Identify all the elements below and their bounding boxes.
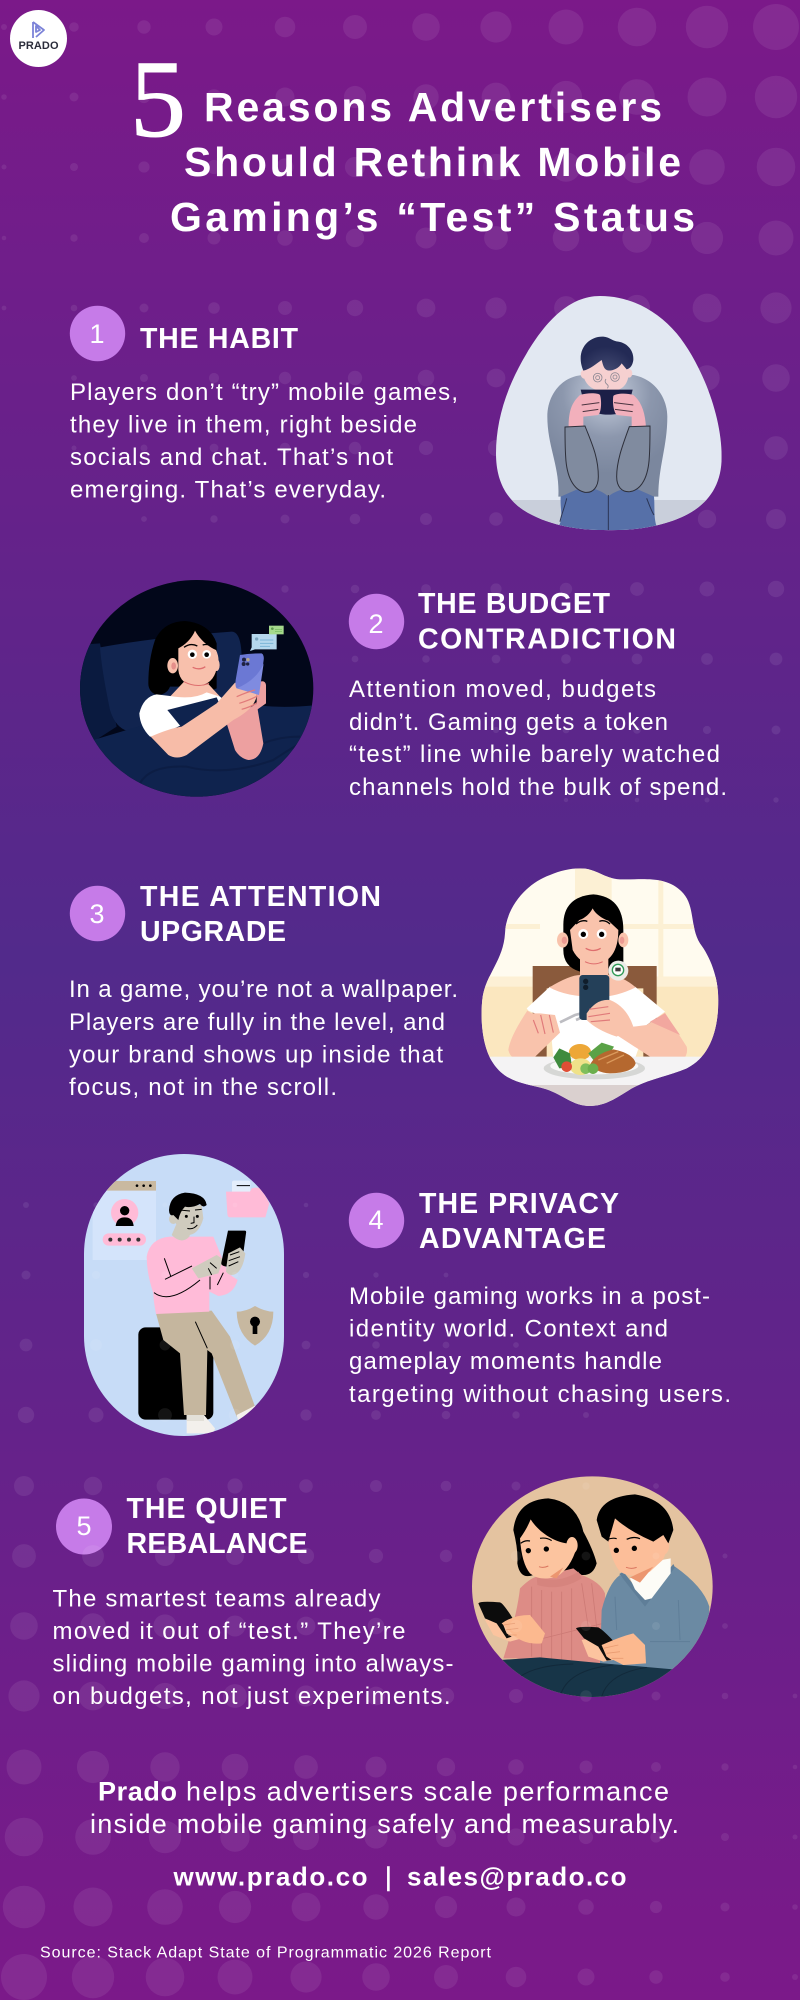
- number badge 5: 5: [76, 1511, 92, 1541]
- heading: the quiet rebalance: REBALANCE: [126, 1528, 308, 1560]
- body text 5: moved it out of “test.” They’re: [52, 1618, 406, 1645]
- heading: the quiet rebalance: [126, 1493, 308, 1560]
- logo: Prado: PRADO: [18, 40, 59, 52]
- body text 1: [70, 379, 458, 504]
- illustration: man absorbed in phone: [496, 296, 722, 530]
- body text 5: sliding mobile gaming into always-: [52, 1650, 454, 1678]
- panel: reason 1 the habit: [70, 296, 722, 530]
- body text 3: Players are fully in the level, and: [69, 1009, 445, 1036]
- body text 4: Mobile gaming works in a post-: [349, 1283, 710, 1310]
- panel: reason 5 the quiet rebalance: [52, 1470, 720, 1710]
- closing statement: helps advertisers scale performance: [186, 1776, 669, 1806]
- body text 4: targeting without chasing users.: [349, 1381, 731, 1408]
- number badge 2: 2: [368, 609, 384, 639]
- body text 3: [69, 976, 458, 1101]
- heading: the habit: THE HABIT: [140, 323, 299, 355]
- number badge 2: [349, 594, 404, 649]
- body text 5: on budgets, not just experiments.: [52, 1683, 450, 1710]
- body text 1: socials and chat. That’s not: [70, 444, 393, 471]
- heading: the budget contradiction: THE BUDGET: [418, 588, 611, 620]
- body text 2: Attention moved, budgets: [349, 676, 656, 703]
- heading: the attention upgrade: THE ATTENTION: [140, 881, 381, 913]
- illustration: man with phone and privacy icons: [80, 1150, 290, 1440]
- body text 2: channels hold the bulk of spend.: [349, 774, 727, 801]
- contact links: www.prado.co: [172, 1862, 368, 1892]
- title: [130, 38, 695, 240]
- body text 1: emerging. That’s everyday.: [70, 476, 386, 504]
- body text 5: The smartest teams already: [52, 1586, 380, 1612]
- body text 1: Players don’t “try” mobile games,: [70, 379, 458, 406]
- heading: the privacy advantage: THE PRIVACY: [419, 1188, 619, 1220]
- number badge 3: [70, 886, 125, 941]
- closing statement: [90, 1776, 679, 1839]
- number badge 1: 1: [89, 319, 105, 349]
- body text 3: focus, not in the scroll.: [69, 1074, 337, 1101]
- body text 2: didn’t. Gaming gets a token: [349, 709, 668, 736]
- contact links: sales@prado.co: [407, 1862, 626, 1892]
- heading: the quiet rebalance: THE QUIET: [126, 1493, 287, 1525]
- body text 4: [349, 1283, 731, 1408]
- title: Gaming’s “Test” Status: [170, 194, 695, 240]
- body text 4: gameplay moments handle: [349, 1348, 662, 1375]
- number badge 4: 4: [368, 1205, 384, 1235]
- heading: the attention upgrade: UPGRADE: [140, 916, 286, 948]
- number badge 5: [56, 1498, 112, 1554]
- body text 3: In a game, you’re not a wallpaper.: [69, 976, 458, 1003]
- title: 5: [130, 38, 186, 160]
- title: Reasons Advertisers: [204, 84, 662, 130]
- number badge 4: [349, 1193, 404, 1248]
- body text 2: [349, 676, 727, 801]
- panel: reason 2 the budget contradiction: [73, 573, 727, 807]
- heading: the privacy advantage: [419, 1188, 619, 1255]
- heading: the attention upgrade: [140, 881, 381, 948]
- contact links: |: [385, 1862, 392, 1892]
- illustration: couple on phones: [467, 1470, 720, 1703]
- panel: reason 3 the attention upgrade: [69, 863, 723, 1110]
- closing statement: Prado: [98, 1776, 177, 1806]
- heading: the privacy advantage: ADVANTAGE: [419, 1223, 606, 1255]
- heading: the budget contradiction: CONTRADICTION: [418, 624, 676, 656]
- number badge 3: 3: [89, 899, 105, 929]
- source note: Source: Stack Adapt State of Programmatic 2026 Report: [40, 1944, 492, 1962]
- body text 1: they live in them, right beside: [70, 412, 417, 438]
- illustration: woman in bed with phone: [80, 580, 314, 797]
- number badge 1: [70, 306, 125, 361]
- title: Should Rethink Mobile: [184, 139, 681, 185]
- body text 5: [52, 1586, 454, 1710]
- body text 3: your brand shows up inside that: [69, 1042, 443, 1068]
- illustration: woman with phone at meal: [477, 863, 723, 1110]
- logo: Prado: [10, 10, 67, 67]
- body text 2: “test” line while barely watched: [349, 741, 720, 768]
- body text 4: identity world. Context and: [349, 1316, 668, 1342]
- contact links: [172, 1862, 626, 1892]
- heading: the budget contradiction: [418, 588, 676, 656]
- panel: reason 4 the privacy advantage: [80, 1150, 731, 1440]
- closing statement: inside mobile gaming safely and measurably.: [90, 1809, 679, 1839]
